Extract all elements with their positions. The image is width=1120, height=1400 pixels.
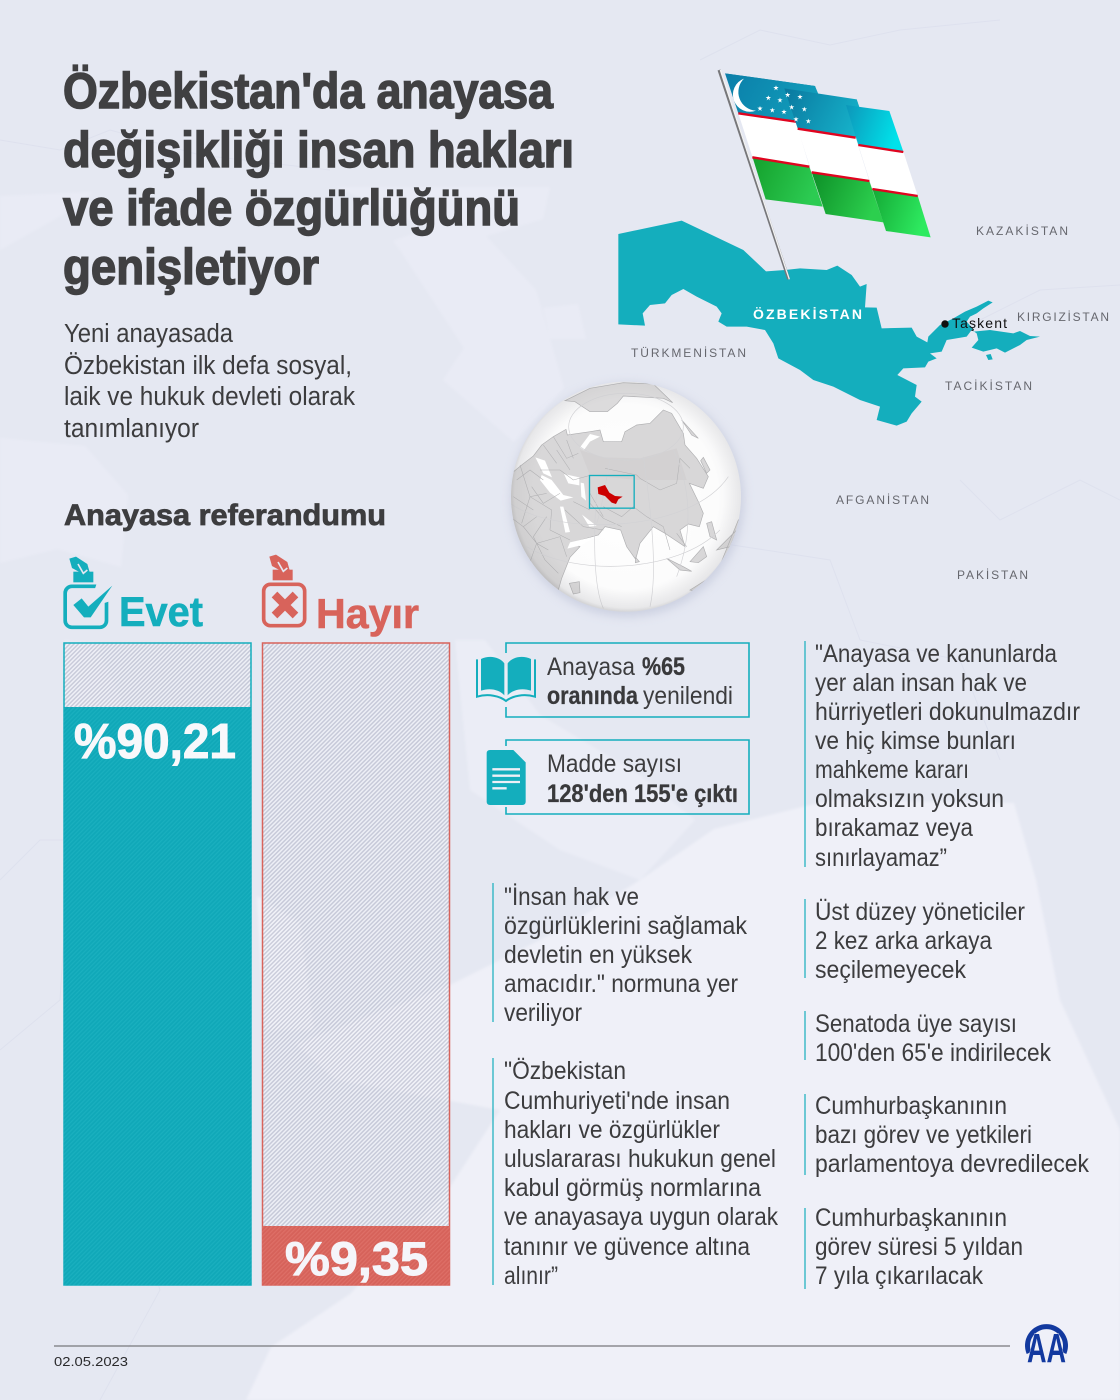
icon: book xyxy=(477,657,535,701)
text block: inviolable rights: mahkeme kararı xyxy=(815,756,969,784)
icon: no ballot xyxy=(264,555,305,626)
text block: executives: 2 kez arka arkaya xyxy=(815,927,992,955)
date: 02.05.2023 xyxy=(54,1354,128,1369)
text block: inviolable rights: ve hiç kimse bunları xyxy=(815,727,1016,755)
bar: Hayır xyxy=(262,643,450,1286)
callout: renewal rate xyxy=(477,643,749,717)
map labels: KAZAKİSTAN xyxy=(976,224,1068,238)
callout: renewal rate: oranında xyxy=(547,682,639,710)
text block: presidential powers: Cumhurbaşkanının xyxy=(815,1092,1007,1120)
text block: inviolable rights xyxy=(805,640,1080,872)
title: ve ifade özgürlüğünü xyxy=(63,180,520,236)
flag of Uzbekistan on pole xyxy=(719,70,931,279)
text block: senate: Senatoda üye sayısı xyxy=(815,1010,1017,1038)
value: Evet: %90,21 xyxy=(74,715,236,769)
text block: international law: hakları ve özgürlükler xyxy=(504,1116,720,1144)
title: Özbekistan'da anayasa xyxy=(63,63,554,119)
text block: inviolable rights: "Anayasa ve kanunlarda xyxy=(815,640,1057,668)
globe xyxy=(500,382,744,617)
callout: renewal rate: yenilendi xyxy=(643,682,733,710)
map labels: AFGANİSTAN xyxy=(836,493,929,507)
text block: presidential term: görev süresi 5 yıldan xyxy=(815,1233,1023,1261)
map labels: KIRGIZİSTAN xyxy=(1017,310,1109,324)
text block: presidential powers: bazı görev ve yetkileri xyxy=(815,1121,1032,1149)
text block: presidential term: 7 yıla çıkarılacak xyxy=(815,1262,983,1290)
map labels: PAKİSTAN xyxy=(957,568,1028,582)
text block: human rights goal: amacıdır." normuna yer xyxy=(504,970,738,998)
text block: international law xyxy=(493,1057,778,1290)
text block: international law: uluslararası hukukun genel xyxy=(504,1145,776,1173)
text block: inviolable rights: olmaksızın yoksun xyxy=(815,785,1004,813)
text block: presidential powers xyxy=(805,1092,1089,1178)
text block: presidential term: Cumhurbaşkanının xyxy=(815,1204,1007,1232)
value: Hayır: %9,35 xyxy=(285,1232,428,1285)
subtitle: Özbekistan ilk defa sosyal, xyxy=(64,352,352,380)
map labels: Taşkent xyxy=(952,315,1007,331)
title: genişletiyor xyxy=(63,239,319,295)
callout: article count: Madde sayısı xyxy=(547,750,682,778)
icon: yes ballot xyxy=(65,557,112,627)
text block: human rights goal xyxy=(493,882,747,1027)
text block: international law: kabul görmüş normlarına xyxy=(504,1174,761,1202)
text block: senate: 100'den 65'e indirilecek xyxy=(815,1039,1051,1067)
text block: human rights goal: veriliyor xyxy=(504,999,582,1027)
text block: international law: Cumhuriyeti'nde insan xyxy=(504,1087,730,1115)
text block: inviolable rights: bırakamaz veya xyxy=(815,814,973,842)
subtitle: Yeni anayasada xyxy=(64,320,234,348)
map labels: TÜRKMENİSTAN xyxy=(631,346,746,360)
callout: article count: 128'den 155'e çıktı xyxy=(547,780,738,808)
map labels: TACİKİSTAN xyxy=(945,379,1032,393)
subtitle: tanımlanıyor xyxy=(64,415,199,443)
text block: international law: "Özbekistan xyxy=(504,1057,626,1085)
title: değişikliği insan hakları xyxy=(63,122,574,178)
text block: human rights goal: devletin en yüksek xyxy=(504,941,692,969)
map labels xyxy=(631,224,1109,582)
icon: document xyxy=(487,750,526,805)
map labels: ÖZBEKİSTAN xyxy=(753,306,862,322)
text block: presidential term xyxy=(805,1204,1023,1290)
title xyxy=(63,63,574,295)
logo: AA: AA xyxy=(1027,1325,1066,1371)
text block: executives: seçilemeyecek xyxy=(815,956,966,984)
label: Evet: Evet xyxy=(119,588,203,635)
text block: executives xyxy=(805,898,1025,984)
callout: article count xyxy=(487,740,749,814)
callout: renewal rate: %65 xyxy=(642,653,685,681)
logo: AA xyxy=(1027,1325,1066,1371)
label: Hayır: Hayır xyxy=(316,590,419,637)
text block: executives: Üst düzey yöneticiler xyxy=(815,898,1025,926)
text block: international law: tanınır ve güvence altına xyxy=(504,1233,750,1261)
text block: inviolable rights: hürriyetleri dokunulmazdır xyxy=(815,698,1080,726)
text block: presidential powers: parlamentoya devredilecek xyxy=(815,1150,1089,1178)
text block: inviolable rights: sınırlayamaz” xyxy=(815,844,947,872)
map: Uzbekistan xyxy=(618,221,1040,426)
text block: international law: alınır” xyxy=(504,1262,558,1290)
text block: inviolable rights: yer alan insan hak ve xyxy=(815,669,1027,697)
text block: senate xyxy=(805,1010,1051,1067)
heading: referendum: Anayasa referandumu xyxy=(64,499,386,532)
text block: human rights goal: özgürlüklerini sağlamak xyxy=(504,912,747,940)
bar: Evet xyxy=(64,643,252,1286)
subtitle xyxy=(64,320,355,443)
text block: human rights goal: "İnsan hak ve xyxy=(504,882,639,911)
callout: renewal rate: Anayasa xyxy=(547,653,635,681)
text block: international law: ve anayasaya uygun olarak xyxy=(504,1203,778,1231)
footer rule xyxy=(54,1345,1010,1347)
subtitle: laik ve hukuk devleti olarak xyxy=(64,383,355,411)
